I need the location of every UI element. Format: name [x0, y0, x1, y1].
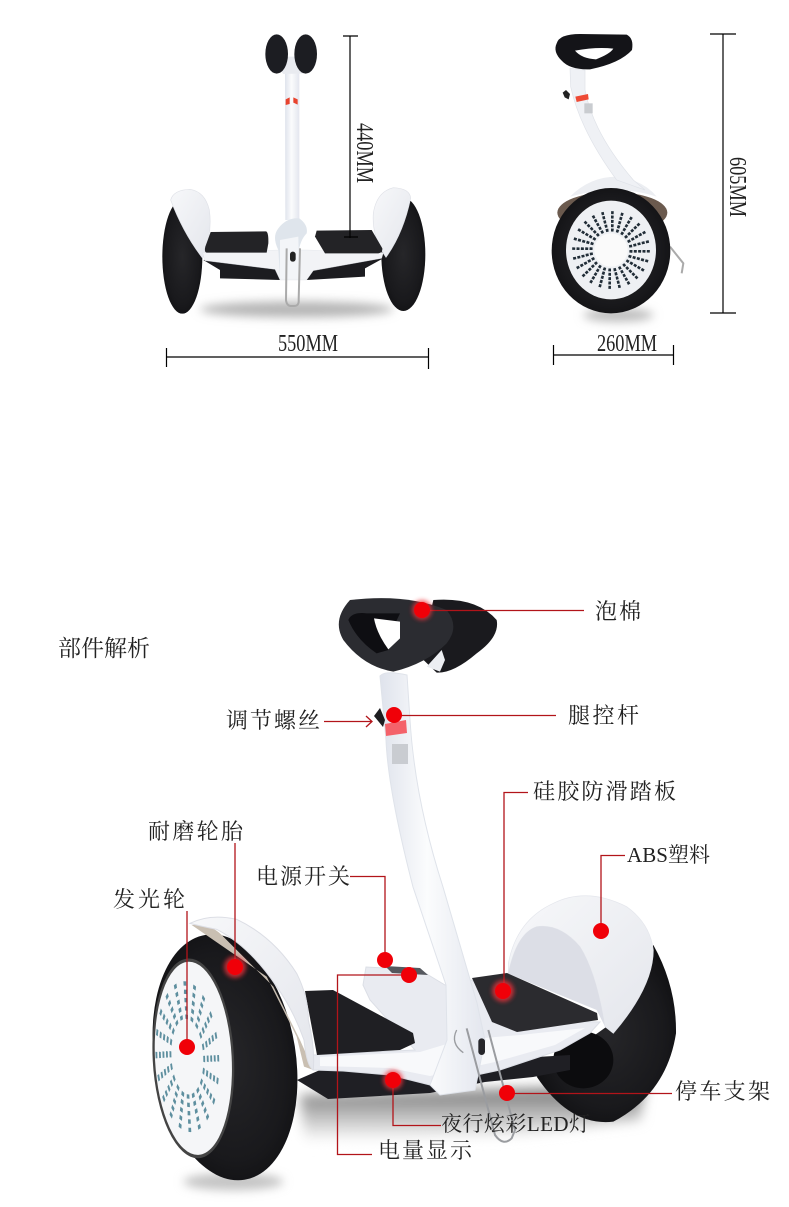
fender	[190, 917, 314, 1070]
chassis	[203, 250, 383, 280]
stem	[380, 673, 485, 1095]
line: ABS	[601, 856, 625, 931]
fender	[570, 177, 657, 197]
dimension 260MM	[554, 331, 674, 365]
label: kickstand: 停车支架	[675, 1079, 770, 1104]
red band	[385, 720, 407, 736]
label: power switch: 电源开关	[256, 864, 350, 889]
hub	[150, 960, 237, 1157]
QR sticker	[584, 103, 593, 113]
power port	[290, 252, 296, 262]
tire	[136, 924, 314, 1191]
right wheel	[381, 198, 425, 311]
hub dots	[574, 213, 648, 287]
leader lines	[187, 610, 672, 1154]
grip inner	[348, 613, 400, 653]
clamp ring	[454, 1030, 463, 1053]
hub	[566, 201, 656, 299]
line: wheel	[186, 911, 188, 1047]
side view scooter	[552, 34, 683, 322]
left fender	[171, 189, 210, 258]
right pedal	[472, 973, 598, 1032]
dimension 440MM	[343, 36, 377, 238]
crossbar	[280, 57, 307, 74]
line: power switch	[350, 876, 385, 960]
red band	[575, 94, 589, 102]
kickstand wire	[467, 1028, 515, 1142]
label: adjust screw: 调节螺丝	[226, 708, 320, 733]
inner hub shadow	[553, 1032, 613, 1088]
mount	[427, 650, 445, 672]
marker dots	[179, 602, 609, 1101]
ground shadow	[300, 1085, 645, 1142]
platform highlight	[320, 1028, 585, 1076]
arrow: adjust screw	[324, 716, 372, 727]
right wheel and fender	[507, 896, 676, 1122]
left grip	[265, 34, 288, 74]
QR sticker	[392, 744, 408, 764]
right grip	[294, 34, 317, 74]
label: ABS plastic: ABS塑料	[627, 843, 710, 867]
hub dots	[153, 982, 222, 1132]
underside	[203, 253, 383, 280]
handlebar hole	[575, 48, 613, 59]
platform	[313, 967, 600, 1085]
grip opening	[374, 618, 400, 649]
left pedal	[305, 990, 415, 1055]
label: leg control bar: 腿控杆	[568, 703, 639, 728]
dimension 260MM: 260MM	[597, 331, 657, 357]
label: LED light: 夜行炫彩LED灯	[441, 1112, 590, 1136]
line: leg control	[394, 714, 556, 716]
pole	[285, 72, 299, 220]
line: pedal	[504, 792, 528, 991]
dimension 605MM: 605MM	[724, 157, 750, 217]
kickstand	[670, 247, 683, 273]
label: tire: 耐磨轮胎	[148, 819, 244, 844]
pole joint	[275, 218, 307, 277]
handlebar	[555, 34, 632, 69]
right fender	[508, 896, 653, 1033]
dimension 550MM	[166, 331, 428, 369]
line: LED	[393, 1080, 441, 1126]
label: battery display: 电量显示	[378, 1138, 473, 1163]
right fender	[373, 188, 411, 257]
right tire	[537, 945, 676, 1122]
section heading: 部件解析	[58, 636, 150, 661]
chassis and pedals	[297, 966, 600, 1099]
label: anti-slip pedal: 硅胶防滑踏板	[533, 779, 676, 804]
left wheel	[162, 200, 202, 314]
right pedal	[315, 230, 382, 253]
stand	[454, 1028, 515, 1142]
tan fender underside	[557, 192, 667, 233]
back grip	[420, 600, 497, 673]
rim ring	[147, 956, 239, 1160]
dimension 550MM: 550MM	[278, 331, 338, 357]
underside	[297, 1055, 570, 1099]
display panel	[385, 966, 428, 975]
label: foam: 泡棉	[595, 599, 641, 624]
line: kickstand	[507, 1092, 672, 1094]
line: tire	[234, 843, 236, 967]
front view scooter	[162, 34, 425, 317]
line: battery display	[338, 975, 409, 1154]
line: foam	[422, 610, 584, 612]
dimension 605MM	[710, 34, 750, 313]
fender underside	[192, 925, 313, 1070]
pole red marks	[286, 97, 298, 105]
tire	[552, 188, 670, 313]
marker glows	[224, 600, 514, 1090]
left pedal	[205, 231, 268, 253]
dimension 440MM: 440MM	[351, 123, 377, 183]
adjust screw	[374, 708, 385, 727]
kickstand	[286, 248, 300, 306]
adjust screw	[563, 90, 570, 99]
label: glowing wheel: 发光轮	[113, 887, 185, 912]
part labels	[113, 599, 770, 1163]
port	[478, 1038, 485, 1055]
handlebar	[339, 598, 497, 673]
hub centre	[594, 233, 628, 267]
pole	[570, 68, 645, 190]
front wheel and fender	[136, 917, 314, 1191]
front grip	[339, 598, 453, 672]
